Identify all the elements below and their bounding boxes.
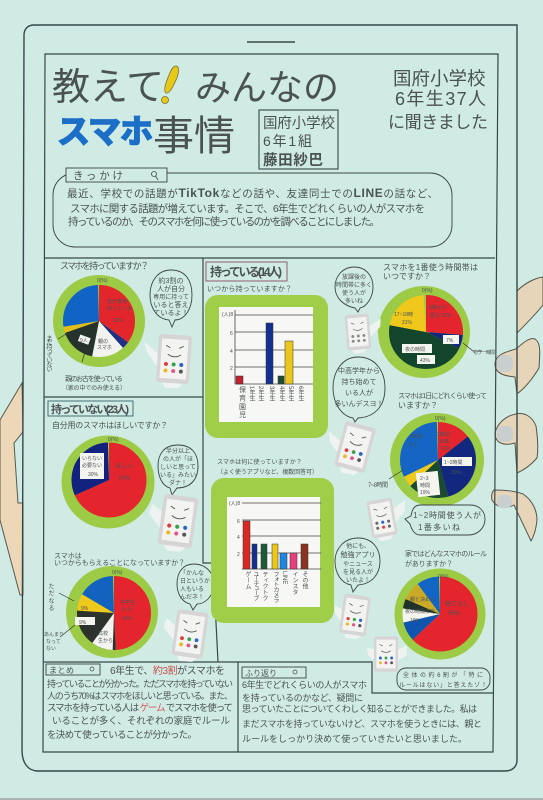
icon: phone mascot — [366, 495, 411, 543]
pie label: other time — [463, 343, 495, 356]
pie chart: want a phone — [62, 436, 154, 528]
callout — [150, 270, 192, 327]
callout: 1~2時間使う人が — [413, 510, 481, 520]
bar chart: uses — [211, 478, 334, 623]
panel: summary — [46, 664, 233, 741]
summary text: 6年生で、約3割がスマホを — [110, 664, 225, 677]
callout: いる人が — [345, 388, 373, 397]
heading — [46, 664, 100, 675]
survey note: に聞きました — [388, 113, 488, 132]
icon: phone mascot — [141, 333, 192, 390]
pie label: parents phone: 親のお古を使っている — [65, 374, 123, 383]
summary text: を決めて使っていることが分かった。 — [47, 729, 197, 741]
callout — [335, 267, 373, 312]
reflection text: ルールをしっかり決めて使っていきたいと思いました。 — [242, 733, 467, 744]
question: スマホは1日にどれくらい使って — [398, 391, 487, 400]
callout: 中高学年から — [338, 366, 380, 375]
heading: ふり返り — [245, 669, 277, 678]
bar chart: uses: LINE — [281, 571, 287, 584]
pie chart: hours per day: 2~3 — [420, 476, 429, 482]
pie chart: time of day: 7% — [446, 338, 454, 344]
pie label: hours: 7~8時間 — [368, 481, 388, 489]
pie chart: house rules: 夜の時間まで — [405, 609, 435, 615]
panel: do not own — [44, 401, 214, 664]
callout: ダナ！ — [169, 479, 187, 487]
pie chart: want a phone: 必要ない — [82, 462, 102, 469]
callout: 使う人が — [342, 289, 366, 297]
pie chart: hours per day: 3時間 — [410, 434, 423, 440]
panel: time of day — [319, 262, 495, 478]
panel: house rules — [330, 538, 490, 690]
author box: 藤田紗巴 — [263, 152, 323, 169]
bar chart: since when: (人)8 — [222, 312, 233, 318]
callout: を見る人が — [343, 568, 373, 576]
title — [52, 66, 339, 159]
icon: yellow exclamation — [162, 66, 179, 104]
question: いますか？ — [398, 401, 438, 410]
pie chart: time of day — [378, 286, 470, 378]
author box: 国府小学校 — [263, 115, 336, 132]
pie chart: when you can get one: 9% — [79, 620, 87, 626]
callout: 多いんデスヨ！ — [334, 399, 384, 408]
callout: 他にも、 — [346, 542, 370, 550]
callout: 半分以上 — [166, 447, 190, 455]
pie chart: ownership: 親の — [98, 339, 108, 345]
callout: 1番多いね — [418, 522, 460, 532]
callout: ルールはない」と答えたゾ！ — [399, 681, 487, 689]
callout — [158, 445, 198, 495]
survey note: 6年生37人 — [395, 89, 486, 109]
callout: 全体の約6割が「特に — [403, 671, 483, 679]
pie chart: house rules: 特になし — [445, 600, 469, 608]
icon: phone mascot — [330, 592, 371, 641]
pie chart: house rules: 親と決める — [410, 596, 435, 603]
question: when: スマホは — [54, 552, 82, 560]
bar chart: uses: ゲーム — [244, 570, 251, 589]
pie chart: ownership: 自分専用 — [107, 298, 127, 305]
panel: hours per day — [366, 391, 487, 543]
pie chart: when you can get one: 中学生 — [120, 599, 135, 606]
pie chart: when you can get one: 0(%) — [112, 570, 123, 576]
author box — [259, 110, 338, 169]
pie label: left: まだ持っていない — [45, 335, 52, 372]
callout: いたよ！ — [346, 577, 370, 584]
callout: いる」みたい — [160, 472, 196, 479]
callout: 放課後の — [342, 273, 366, 281]
pie chart: time of day: 5時から — [429, 304, 447, 311]
bar chart: uses: (人)8 — [229, 501, 240, 507]
pie chart: house rules: 0(%) — [438, 574, 449, 580]
bar chart: uses: ユーチューブ — [252, 571, 259, 601]
bar chart: uses: 2 — [237, 552, 240, 558]
pie chart: hours per day: 1時間 — [437, 432, 450, 438]
reason text: 最近、学校での話題がTikTokなどの話や、友達同士でのLINEの話など、 — [67, 186, 438, 200]
question: がありますか？ — [405, 559, 453, 568]
heading: 持っている(14人) — [210, 264, 282, 279]
icon: phone mascot — [144, 492, 199, 554]
pie chart: hours per day: 以上 — [408, 441, 418, 448]
callout: 約3割の — [159, 276, 183, 285]
callout: いると答え — [154, 300, 188, 309]
pie chart: want a phone: 30% — [88, 472, 99, 478]
title: 教えて — [52, 67, 164, 109]
pie chart: house rules: 19% — [410, 618, 421, 624]
icon: phone mascot — [159, 607, 209, 664]
panel: own a phone — [205, 262, 334, 623]
callout: 時間帯に多く — [336, 281, 372, 289]
callout: しいと思って — [160, 464, 196, 471]
callout: 人もいる — [180, 586, 204, 593]
bar chart: uses: インスタ — [291, 571, 298, 595]
pie chart: when you can get one: 54% — [122, 616, 133, 622]
pie label: not yet — [44, 632, 64, 652]
callout — [397, 668, 490, 690]
pie label: will be: ただなる — [47, 583, 54, 611]
bar chart: since when: 6 — [230, 331, 233, 337]
pie chart: hours per day: 19% — [420, 490, 431, 496]
bar chart: since when: 2年生 — [257, 386, 264, 402]
callout: 持ち始めて — [342, 377, 376, 386]
callout: やニュース — [343, 560, 373, 568]
pie label: not yet: ない — [46, 645, 56, 652]
question — [398, 391, 487, 410]
pie chart: hours per day: 0(%) — [435, 416, 446, 422]
callout: 「かんな — [180, 570, 204, 577]
bar chart: since when: 1年生 — [248, 386, 255, 402]
pie chart: when you can get one: 生から — [98, 637, 113, 644]
survey note — [388, 68, 488, 132]
pie label: not yet: あんまり — [44, 632, 64, 638]
pie chart: time of day: 21% — [402, 320, 413, 326]
callout: 勉強アプリ — [340, 550, 376, 559]
pie chart: hours per day: 11% — [441, 446, 451, 452]
pie chart: want a phone: ほしい — [115, 463, 133, 470]
right hand: finger 3 — [492, 490, 537, 541]
bar chart: uses: ティクトク — [261, 571, 268, 601]
panel: reason — [53, 168, 452, 247]
question — [405, 549, 487, 568]
pie chart: house rules: 65% — [448, 611, 461, 617]
pie chart: want a phone: 70% — [118, 476, 131, 482]
pie chart: hours per day — [389, 413, 484, 507]
left hand — [0, 383, 23, 595]
callout — [335, 538, 380, 592]
icon: phone mascot — [345, 312, 384, 355]
title: みんなの — [195, 67, 339, 108]
survey note: 国府小学校 — [393, 68, 486, 89]
author box: 6年1組 — [263, 133, 312, 149]
pie chart: time of day: 寝る 30% — [430, 312, 452, 319]
bar chart: uses: その他 — [301, 571, 308, 590]
callout: の人が「ほ — [163, 455, 193, 463]
title: 事情 — [153, 113, 235, 159]
pie chart: when you can get one — [59, 566, 158, 658]
reflection text: まだスマホを持っていないけど、スマホを使うときには、親と — [242, 718, 482, 729]
bar chart: since when: 保育園児 — [238, 385, 246, 419]
heading: reason: きっかけ — [73, 170, 123, 182]
panel: reflection — [242, 667, 482, 744]
callout: 日というか — [180, 578, 210, 585]
callout — [405, 505, 485, 535]
bar chart: since when: 4 — [230, 349, 233, 355]
question: when — [54, 552, 185, 567]
right hand: finger 1 — [495, 339, 540, 394]
pie label: other time: もう一時間 — [473, 350, 495, 356]
question: what for: （よく使うアプリなど、複数回答可） — [217, 468, 318, 476]
reason text — [67, 186, 438, 228]
pie chart: when you can get one: から — [122, 606, 132, 613]
panel: do you own a smartphone — [45, 260, 192, 392]
bar chart: since when: 3年生 — [268, 386, 275, 402]
question: want one: 自分用のスマホはほしいですか？ — [52, 420, 168, 430]
pie chart: when you can get one: 高校 — [98, 630, 108, 637]
bar chart: since when: 5年生 — [287, 386, 294, 402]
pie chart: time of day: 0(%) — [422, 288, 433, 294]
summary text: いることが多く、それぞれの家庭でルール — [52, 715, 230, 727]
heading — [242, 667, 306, 678]
bar chart: since when: 6年生 — [297, 386, 304, 402]
heading: スマホを持っていますか？ — [60, 260, 149, 271]
reflection text: 6年生でどれくらいの人がスマホ — [242, 679, 367, 690]
bar chart: uses: 4 — [237, 535, 240, 541]
pie chart: ownership — [53, 275, 145, 367]
callout: ているよ！ — [154, 309, 188, 317]
pie chart: house rules — [394, 568, 486, 660]
callout: 多いね — [345, 297, 363, 305]
bar chart: uses: 6 — [237, 519, 240, 525]
callout: 専用に持って — [153, 293, 189, 301]
tablet speaker — [247, 41, 295, 43]
callout — [177, 564, 214, 610]
heading: まとめ — [49, 666, 74, 675]
question: what for — [217, 458, 318, 476]
right hand: finger 2 — [495, 414, 538, 473]
summary text: 持っていることが分かった。ただスマホを持っていない — [47, 678, 233, 689]
heading: reason — [66, 168, 167, 182]
pie chart: want a phone: いらない — [82, 455, 102, 462]
pie chart: ownership: スマホ — [97, 345, 112, 351]
question: since when: いつから持っていますか？ — [207, 284, 292, 293]
pie chart: when you can get one: 9% — [81, 606, 89, 612]
bar chart: since when: 2 — [230, 366, 233, 372]
pie chart: ownership: 持っている — [107, 305, 132, 312]
reflection text: を持っているのかなど、疑問に — [242, 692, 363, 703]
pie chart: time of day: 17~18時 — [394, 312, 413, 318]
question — [383, 262, 478, 281]
callout: んだネ！ — [180, 594, 204, 601]
callout: 人が自分 — [157, 284, 185, 293]
bar chart: uses: フォトカメラ — [272, 571, 279, 603]
title: スマホ — [57, 113, 153, 150]
pie label: parents phone — [62, 374, 126, 392]
right hand: palm — [517, 277, 543, 333]
icon: phone mascot — [367, 636, 407, 672]
pie chart: ownership: 0(%) — [97, 278, 108, 284]
pie chart: hours per day: 時間 — [420, 483, 430, 489]
summary text: スマホを持っている人は ゲーム でスマホを使って — [47, 702, 233, 714]
heading — [206, 262, 287, 281]
question: いつですか？ — [383, 272, 431, 281]
pie chart: time of day: 夜の時間 — [405, 347, 425, 353]
pie chart: ownership: 32% — [113, 318, 124, 324]
question: スマホを1番使う時間帯は — [383, 262, 478, 272]
reflection text: 思っていたことについてくわしく知ることができました。私は — [242, 703, 477, 714]
pie chart: hours per day: 30% — [451, 470, 462, 476]
pie chart: time of day: 43% — [420, 358, 431, 364]
bar chart: since when — [205, 295, 328, 438]
reflection text — [242, 679, 482, 744]
summary text: 人のうち70%は スマホをほしいと思っている。また、 — [47, 691, 233, 701]
callout — [333, 357, 385, 422]
question: what for: スマホは何に使っていますか？ — [217, 458, 302, 466]
question: 家ではどんなスマホのルール — [405, 549, 487, 558]
bar chart: since when: 4年生 — [278, 386, 285, 402]
pie chart: hours per day: 未満 — [439, 438, 449, 445]
pie chart: hours per day: 1~2時間 — [444, 460, 462, 466]
pie chart: ownership: 9人 — [80, 338, 88, 344]
reason text: スマホに関する話題が増えています。そこで、6年生でどれくらいの人がスマホを — [70, 202, 425, 215]
question: when: いつからもらえることになっていますか？ — [54, 559, 185, 567]
reason text: 持っているのか、そのスマホを何に使っているのかを調べることにしました。 — [68, 215, 380, 228]
pie label: not yet: なって — [46, 638, 61, 645]
icon: phone mascot — [319, 417, 376, 478]
heading: 持っていない(23人) — [51, 402, 129, 416]
page frame — [43, 54, 498, 752]
section divider lines — [44, 258, 495, 752]
pie label: parents phone: （家の中でのみ使える） — [62, 384, 126, 392]
summary text — [47, 664, 233, 741]
pie chart: want a phone: 0(%) — [108, 437, 119, 443]
